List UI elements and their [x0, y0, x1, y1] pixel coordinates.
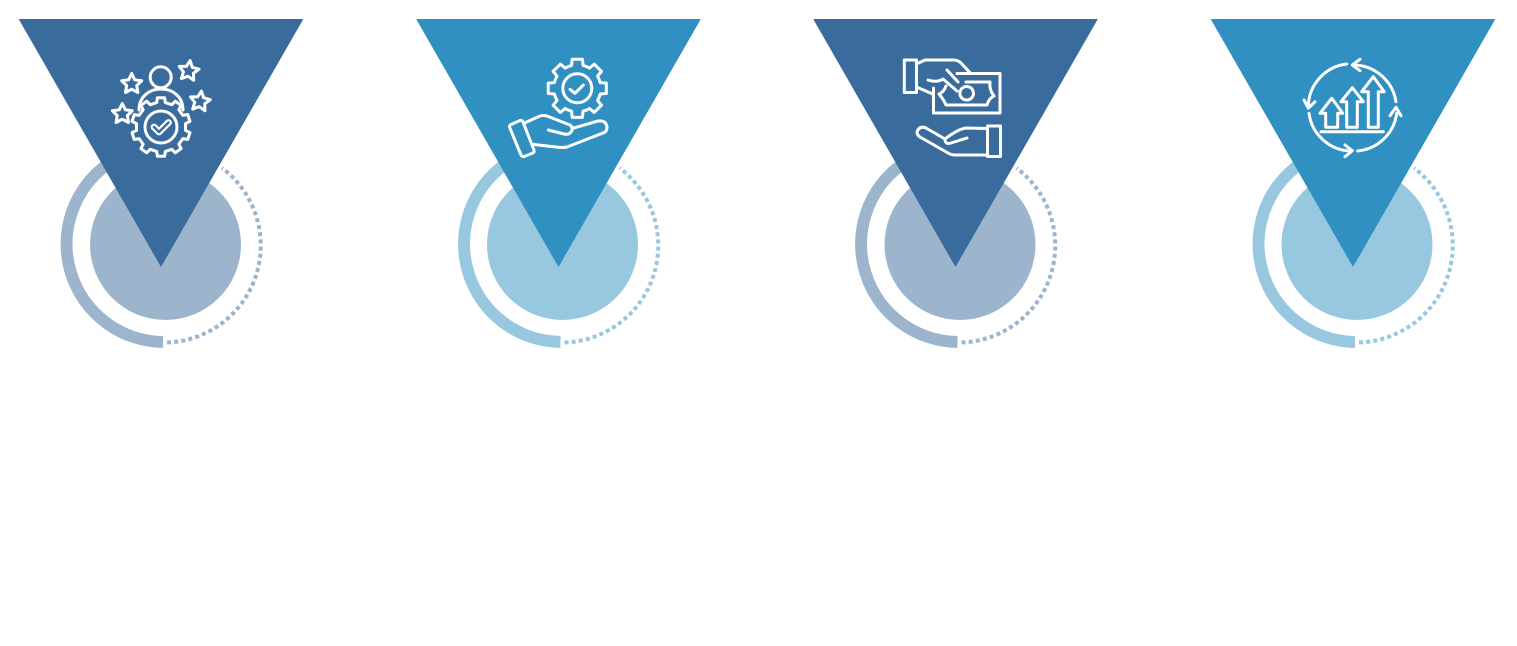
filled circle 1: [90, 169, 241, 320]
icon: person, gear and stars: [112, 59, 211, 156]
icon: growth arrows in cycle: [1304, 59, 1401, 157]
triangle 3: [814, 20, 1097, 266]
filled circle 4: [1282, 169, 1432, 320]
dotted ring arc 3: [962, 168, 1055, 342]
panel: step 3 medallion: [814, 20, 1097, 342]
dotted ring arc 1: [167, 168, 261, 342]
filled circle 3: [884, 169, 1036, 320]
triangle 1: [20, 20, 302, 266]
solid ring arc 3: [861, 164, 958, 342]
solid ring arc 1: [67, 164, 163, 342]
triangle 4: [1212, 20, 1494, 266]
panel: step 2 medallion: [417, 20, 700, 342]
dotted ring arc 2: [564, 168, 658, 342]
solid ring arc 2: [464, 164, 560, 342]
filled circle 2: [487, 169, 638, 320]
dotted ring arc 4: [1359, 168, 1453, 342]
panel: step 4 medallion: [1212, 20, 1494, 342]
solid ring arc 4: [1259, 164, 1355, 342]
icon: hands exchanging money: [904, 60, 1000, 156]
triangle 2: [417, 20, 700, 266]
icon: hand holding gear: [510, 59, 607, 157]
panel: step 1 medallion: [20, 20, 302, 342]
